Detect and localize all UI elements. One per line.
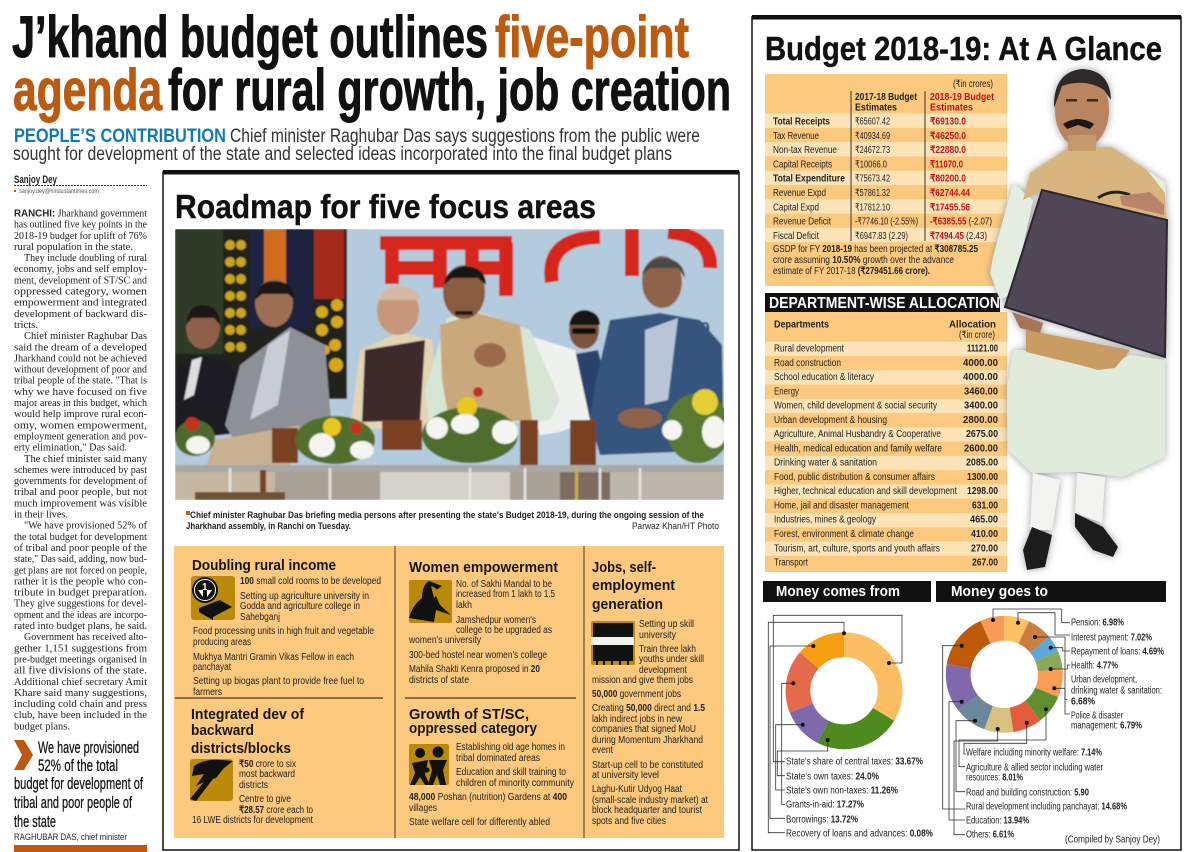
donut chart: money goes to: Welfare including minority welfare: 7.14% [966,748,1102,758]
table: department allocations: 11121.00 [967,344,998,354]
person: chief minister [425,265,590,435]
table: budget estimates: 2017-18 Budget [855,92,918,103]
subheadline: Chief minister Raghubar Das says suggestions from the public were [230,126,700,147]
donut chart: money comes from: Grants-in-aid: 17.27% [786,800,864,810]
photo caption: Parwaz Khan/HT Photo [632,521,719,532]
article body text: has outlined five key points in the [14,220,148,231]
panel: budget at a glance [752,15,1181,850]
block: doubling rural income: Setting up agriculture university in [240,591,369,602]
block: jobs and self-employment: university [639,630,676,641]
table: budget estimates: ₹57861.32 [855,188,890,199]
table: department allocations: Higher, technical education and skill development [774,486,957,497]
article body text: all five divisions of the state. [14,666,147,677]
block: integrated development of backward districts: most backward [239,769,295,780]
block: jobs and self-employment: block headquarter and tourist [592,805,702,816]
table: budget estimates: Total Expenditure [773,174,845,185]
donut chart: money goes to: Police & disaster [1071,710,1123,722]
donut chart: money comes from: Borrowings: 13.72% [786,814,858,826]
article body text: rural population in the state. [14,242,133,253]
table: department allocations: 410.00 [971,529,998,540]
table: budget estimates: -₹6385.55 (-2.07) [930,217,992,228]
table: budget estimates: Capital Receipts [773,159,832,170]
block: jobs and self-employment: generation [592,596,663,613]
table: department allocations: 465.00 [970,515,998,526]
icon: chevron [14,740,33,770]
block: women empowerment: lakh [456,600,472,611]
block: integrated development of backward districts: ₹28.57 crore each to [239,805,313,816]
block: growth of ST/SC: tribal dominated areas [456,753,540,764]
article body text: They include doubling of rural [24,253,147,264]
table: department allocations: Drinking water & sanitation [774,458,877,469]
headline: five-point [495,5,689,70]
flower arrangements [175,387,730,464]
table: department allocations: Home, jail and disaster management [774,500,909,512]
table: department allocations: 267.00 [972,558,998,568]
byline: Sanjoy Dey [14,174,58,186]
table: department allocations: Tourism, art, culture, sports and youth affairs [774,543,940,554]
article body text: why we have focused on five [14,387,148,398]
block: jobs and self-employment: Creating 50,000 direct and 1.5 [592,703,705,714]
subheadline: PEOPLE’S CONTRIBUTION [14,126,226,147]
table: department allocations: Road construction [774,358,841,369]
block: integrated development of backward districts: districts/blocks [191,740,291,757]
block: women empowerment: Women empowerment [409,559,558,576]
table: department allocations: 2675.00 [966,429,998,440]
block: jobs and self-employment: during Momentum Jharkhand [592,735,703,746]
block: growth of ST/SC: Growth of ST/SC, [409,706,529,723]
article body text: state," Das said, adding, now bud- [14,554,147,565]
block: jobs and self-employment: youths under skill [639,654,704,665]
article body text: Jharkhand could not be achieved [14,353,147,364]
heading: money comes from [763,581,931,602]
pull quote [14,738,143,843]
heading: money goes to: Money goes to [951,583,1048,600]
article body text: empowerment and integrated [14,298,147,309]
table: budget estimates: Capital Expd [773,202,819,213]
block: jobs and self-employment: companies that signed MoU [592,724,696,735]
table: budget estimates: (₹in crores) [953,79,993,90]
article body text: the total budget for development [14,532,147,543]
headline: agenda [13,58,163,123]
table: budget estimates: Estimates [930,102,973,114]
block: growth of ST/SC: Establishing old age homes in [456,742,565,753]
article body text: 2018-19 budget for uplift of 76% [14,231,147,242]
table: department allocations: Women, child development & social security [774,401,937,412]
donut chart: money comes from: Recovery of loans and advances: 0.08% [786,828,933,840]
credit: compiled by: (Compiled by Sanjoy Dey) [1065,834,1160,846]
block: jobs and self-employment: 50,000 government jobs [592,689,681,700]
block: jobs and self-employment: spots and five cities [592,816,666,827]
table: department allocations: (₹in crore) [959,330,995,341]
article body text: employment generation and pov- [14,432,147,442]
icon: family silhouette [409,744,449,785]
heading: money comes from: Money comes from [776,583,900,600]
article body text: get plans are not forced on people, [14,565,147,576]
block: jobs and self-employment: mission and give them jobs [592,675,693,686]
block: growth of ST/SC: Education and skill training to [456,767,566,778]
glance heading: Budget 2018-19: At A Glance [765,30,1162,67]
block: integrated development of backward districts: Centre to give [239,794,291,805]
block: integrated development of backward districts: districts [239,780,268,791]
block: doubling rural income: Godda and agriculture college in [240,601,360,612]
donut chart: money goes to [943,609,1164,840]
table: department allocations: 2085.00 [966,458,998,469]
donut chart: money goes to: Rural development including panchayat: 14.68% [966,802,1127,812]
table: budget estimates: ₹46250.0 [930,131,966,142]
subheadline: sought for development of the state and selected ideas incorporated into the final budget plans [13,144,672,165]
article body text: including cold chain and press [14,699,147,710]
article body text: Additional chief secretary Amit [14,677,147,688]
block: jobs and self-employment: development [639,665,687,676]
article body text: pre-budget meetings organised in [14,654,147,666]
table: department allocations: Health, medical education and family welfare [774,443,942,454]
table: department allocations: Urban development & housing [774,415,887,426]
icon: cash and coin: 1 [202,582,208,593]
table: budget estimates: ₹40934.69 [855,131,890,142]
table: budget estimates: ₹75673.42 [855,174,890,185]
table: budget estimates: ₹80200.0 [930,174,966,185]
block: jobs and self-employment: Train three lakh [639,644,696,655]
article body text: major areas in this budget, which [14,398,147,409]
article body text: rather it is the people who con- [14,576,147,587]
panel: roadmap for five focus areas [163,170,739,850]
block: integrated development of backward districts: Integrated dev of [191,706,305,723]
pull quote: We have provisioned [38,738,139,757]
table: department allocations: Transport [774,558,808,568]
block: jobs and self-employment: employment [592,577,675,594]
donut chart: money goes to: 6.68% [1071,696,1095,708]
table: department allocations: Allocation [949,320,996,330]
article body text: They give suggestions for devel- [14,599,147,610]
donut chart: money goes to: Road and building construction: 5.90 [966,788,1089,798]
table: department allocations: Food, public distribution & consumer affairs [774,472,935,483]
article body text: said the dream of a developed [14,342,147,353]
table: department allocations: 3460.00 [964,386,998,397]
person: elderly man [350,286,440,430]
block: jobs and self-employment: Start-up cell to be constituted [592,760,703,771]
block: women empowerment: Jamshedpur women's [456,615,536,626]
pull quote: RAGHUBAR DAS, chief minister [14,832,127,843]
table: department allocations: 4000.00 [963,358,998,369]
article body text: club, have been included in the [14,710,148,721]
article body text: Government has received alto- [24,632,147,643]
block: growth of ST/SC: 48,000 Poshan (nutrition) Gardens at 400 [409,792,567,803]
table: budget estimates: ₹10066.0 [855,159,887,170]
article body text: Khare said many suggestions, [14,688,147,699]
article body text: "We have provisioned 52% of [24,521,148,532]
article body text: without development of poor and [14,365,147,376]
article body text: tribal people of the state. "That is [14,376,147,387]
donut chart: money goes to: Agriculture & allied sector including water [966,762,1103,774]
block: jobs and self-employment: at university level [592,770,659,781]
article body text: Chief minister Raghubar Das [24,331,147,342]
article body text: erty elimination," Das said. [14,443,127,454]
table: budget estimates: estimate of FY 2017-18 (₹279451.66 crore). [773,266,930,277]
block: women empowerment [408,559,558,686]
table: budget estimates: Revenue Expd [773,188,826,199]
table: department allocations: Forest, environment & climate change [774,529,914,540]
block: doubling rural income: Food processing units in high fruit and vegetable [193,626,374,637]
article body text: tribute in budget preparation. [14,588,147,599]
headline: J’khand budget outlines [12,5,488,70]
article body text: schemes were introduced by past [14,465,147,476]
table: budget estimates: ₹22880.0 [930,145,966,156]
donut chart: money comes from: State's own taxes: 24.0% [786,772,879,782]
block: jobs and self-employment: (small-scale industry market) at [592,795,708,806]
table: budget estimates: crore assuming 10.50% growth over the advance [773,255,954,266]
photo caption [186,510,719,532]
block: integrated development of backward districts [190,706,313,826]
footer accent bar [14,845,147,852]
donut chart: money goes to: Health: 4.77% [1071,660,1118,672]
donut chart: money goes to: resources: 8.01% [966,772,1023,784]
roadmap heading: Roadmap for five focus areas [175,188,596,225]
photo: press briefing: 01 [440,329,460,349]
table [175,465,724,500]
block: jobs and self-employment: Jobs, self- [592,559,656,576]
icon: woman silhouette [409,580,452,623]
person: man in blue suit [590,256,724,455]
block: doubling rural income: Mukhya Mantri Gramin Vikas Fellow in each [193,652,354,663]
table: department allocations: Industries, mines & geology [774,515,876,526]
block: integrated development of backward districts: ₹50 crore to six [239,759,296,770]
panel: five focus areas [174,546,724,838]
article body text: governments for development of [14,476,148,487]
article body text: economy, jobs and self employ- [14,264,147,275]
article body text: gether 1,151 suggestions from [14,643,147,654]
article body text: oppressed category, women [14,286,147,298]
block: jobs and self-employment [591,559,708,827]
block: growth of ST/SC: children of minority community [456,778,574,789]
table: budget estimates: Revenue Deficit [773,217,831,228]
block: women empowerment: increased from 1 lakh to 1.5 [456,589,555,600]
photo caption: Chief minister Raghubar Das briefing media persons after presenting the state's Budget 2018-19, during the ongoing session of the [190,510,704,521]
photo: press briefing: 20 [690,319,710,339]
person: far left man [175,304,232,440]
block: jobs and self-employment: Laghu-Kutir Udyog Haat [592,784,682,795]
table: department allocations: 1300.00 [967,472,998,483]
table: department allocations: School education & literacy [774,372,874,383]
block: integrated development of backward districts: 16 LWE districts for development [192,815,313,826]
article body text: of tribal and poor people of the [14,543,148,554]
chairs [272,420,596,465]
article body text: budget plans. [14,721,70,732]
donut chart: money goes to: drinking water & sanitation: [1071,686,1162,696]
article body text: would help improve rural econ- [14,409,147,420]
block: women empowerment: women's university [408,635,481,646]
table: budget estimates: ₹69130.0 [930,116,966,128]
table: budget estimates: ₹7494.45 (2.43) [930,231,987,242]
donut chart: money goes to: management: 6.79% [1071,720,1142,732]
pull quote: tribal and poor people of [14,793,132,812]
block: jobs and self-employment: event [592,745,613,756]
donut chart: money goes to: Interest payment: 7.02% [1071,632,1152,644]
icon: cash and coin [191,576,235,620]
table: budget estimates: Total Receipts [773,116,830,128]
block: women empowerment: No. of Sakhi Mandal to be [456,579,552,590]
table: department allocations: Rural development [774,344,844,354]
article body text: opment and the ideas are incorpo- [14,610,147,621]
article body text: The chief minister said many [24,454,147,465]
donut chart: money goes to: Pension: 6.98% [1071,618,1124,628]
donut chart: money comes from: State's own non-taxes: 11.26% [786,786,898,796]
icon: palm tree [190,759,233,801]
article body text: much improvement was visible [14,498,148,509]
table: budget estimates: 2018-19 Budget [930,92,995,103]
block: jobs and self-employment: Setting up skill [639,619,694,630]
article body text: omy, women empowerment, [14,420,147,431]
table: budget estimates: ₹11070.0 [930,159,963,170]
table: budget estimates: Non-tax Revenue [773,145,837,156]
block: doubling rural income: Doubling rural income [192,557,336,574]
block: jobs and self-employment: lakh indirect jobs in new [592,714,683,725]
heading: money goes to [936,581,1166,602]
block: growth of ST/SC [409,706,574,828]
table: budget estimates: -₹7746.10 (-2.55%) [855,217,918,228]
block: doubling rural income: Setting up biogas plant to provide free fuel to [193,676,364,687]
table: budget estimates [765,74,1007,286]
byline [14,174,147,195]
table: budget estimates: Fiscal Deficit [773,231,819,242]
subheadline [13,126,700,165]
table: budget estimates: Tax Revenue [773,131,819,142]
table: budget estimates: ₹62744.44 [930,188,970,199]
byline: sanjoy.dey@hindustantimes.com [19,188,99,195]
table: budget estimates: ₹17812.10 [855,202,890,213]
article body text: ment, development of ST/SC and [14,275,147,286]
table: budget estimates: Estimates [855,102,897,114]
block: growth of ST/SC: oppressed category [409,720,538,737]
block: doubling rural income: Sahebganj [240,612,280,623]
donut chart: money goes to: Education: 13.94% [966,816,1029,826]
block: women empowerment: 300-bed hostel near women's college [409,650,547,661]
article body text: development of backward dis- [14,309,147,320]
figure: chief minister holding briefcase [990,69,1167,570]
block: women empowerment: districts of state [409,675,469,686]
donut chart: money comes from [768,615,933,840]
block: doubling rural income: producing areas [193,637,251,648]
table: department allocations: 2800.00 [963,415,998,426]
donut chart: money comes from: State's share of central taxes: 33.67% [786,756,923,768]
person: man with sunglasses [568,309,602,420]
photo: press briefing [175,229,730,500]
article body text: tricts. [14,320,38,331]
article body text: rated into budget plans, he said. [14,621,147,632]
table: department allocations: Agriculture, Animal Husbandry & Cooperative [774,429,941,440]
donut chart: money goes to: Urban development, [1071,674,1137,686]
block: growth of ST/SC: villages [409,803,437,814]
table: department allocations: 1298.00 [967,486,998,497]
block: doubling rural income [191,557,381,698]
block: doubling rural income: farmers [193,687,222,698]
table: budget estimates: ₹6947.83 (2.29) [855,231,908,242]
block: doubling rural income: panchayat [193,662,231,673]
photo caption: Jharkhand assembly, in Ranchi on Tuesday. [186,521,351,532]
block: women empowerment: Mahila Shakti Kenra proposed in 20 [409,664,540,675]
table: department allocations: 4000.00 [963,372,998,383]
table: department allocations: 270.00 [971,543,998,554]
table: department allocations: 3400.00 [964,401,998,412]
block: growth of ST/SC: State welfare cell for differently abled [409,817,550,828]
table: budget estimates: ₹17455.56 [930,202,970,213]
headline: for rural growth, job creation [168,58,731,123]
article body text: tribal and poor people, but not [14,487,147,498]
article body text: RANCHI: Jharkhand government [14,208,147,220]
pull quote: budget for development of [14,774,143,793]
table: budget estimates: ₹65607.42 [855,116,890,128]
table: department allocations: 631.00 [972,500,998,512]
article body text [14,208,148,732]
block: women empowerment: college to be upgraded as [456,625,552,636]
table: department allocations: Departments [774,320,829,330]
block: doubling rural income: 100 small cold rooms to be developed [240,576,381,587]
table: department allocations: Energy [774,386,799,397]
article body text: in their lives. [14,510,68,520]
donut chart: money goes to: Others: 6.61% [966,830,1014,840]
table: budget estimates: ₹24672.73 [855,145,890,156]
table: department allocations [765,312,1007,572]
table: department allocations: 2600.00 [964,443,998,454]
icon: crowd of workers [591,621,635,665]
table: budget estimates: GSDP for FY 2018-19 has been projected at ₹308785.25 [773,244,978,255]
pull quote: 52% of the total [38,756,118,775]
pull quote: the state [14,812,56,831]
block: integrated development of backward districts: backward [191,722,254,739]
person: man in grey suit [205,279,331,470]
donut chart: money goes to: Repayment of loans: 4.69% [1071,646,1164,658]
department-wise allocation heading: DEPARTMENT-WISE ALLOCATION [769,295,1000,312]
headline [12,5,731,123]
